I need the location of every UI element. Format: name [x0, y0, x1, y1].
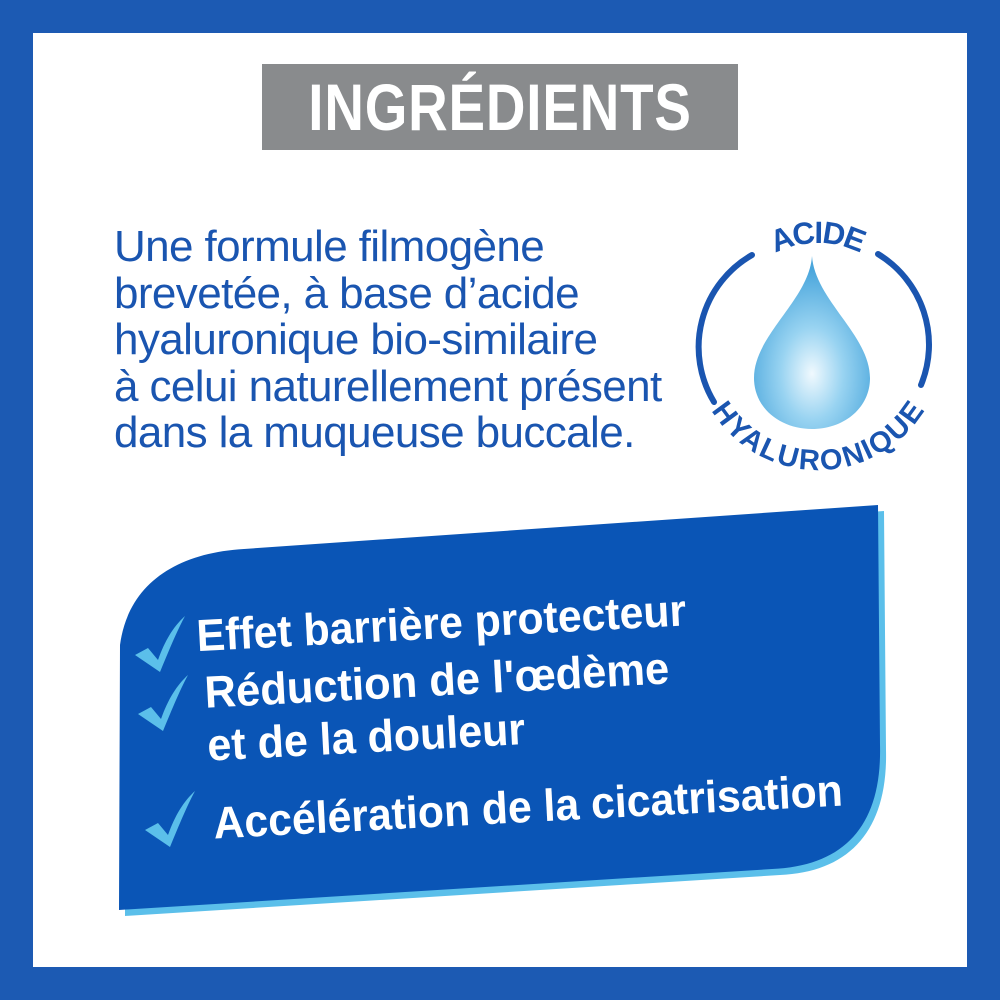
title: INGRÉDIENTS: [308, 70, 692, 144]
text block: description: [114, 222, 662, 457]
icon: check 3: [145, 791, 195, 847]
text: benefits list: Réduction de l'œdème: [203, 642, 670, 718]
icon: acide hyaluronique badge: HYALURONIQUE: [712, 400, 924, 470]
text: benefits list: [195, 577, 844, 849]
text block: description: brevetée, à base d’acide: [114, 268, 579, 318]
icon: acide hyaluronique badge: [696, 222, 932, 470]
text block: description: dans la muqueuse buccale.: [114, 408, 635, 457]
text: benefits list: Accélération de la cicatrisation: [212, 765, 844, 848]
text block: description: hyaluronique bio-similaire: [114, 315, 597, 364]
text block: description: à celui naturellement présent: [114, 362, 662, 410]
text: benefits list: Effet barrière protecteur: [195, 584, 687, 661]
icon: check 2: [138, 675, 188, 731]
icon: check 1: [135, 616, 185, 672]
title: [262, 64, 738, 150]
text block: description: Une formule filmogène: [114, 222, 544, 271]
text: benefits list: et de la douleur: [206, 703, 526, 771]
icon: acide hyaluronique badge: ACIDE: [776, 222, 867, 252]
